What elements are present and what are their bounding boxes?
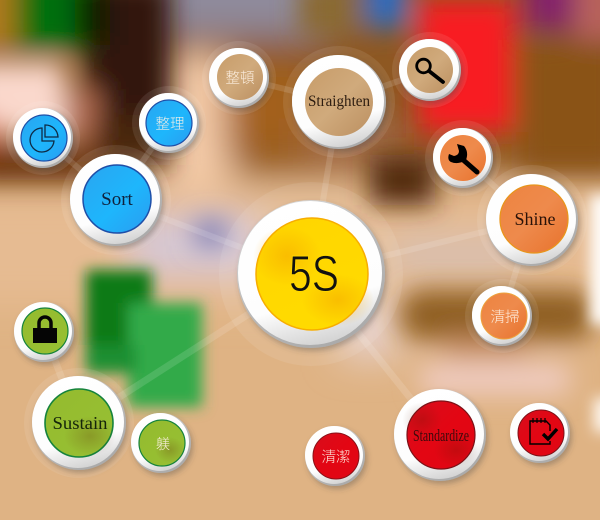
node: 清掃 [472,286,532,346]
node: 清潔 [305,426,365,486]
node: Standardize [394,389,486,481]
icon node: checklist [510,403,570,463]
node: Shine: Shine [514,209,556,229]
node: Sort [70,154,162,246]
node: 整頓: 整頓 [226,67,254,88]
icon node: wrench [433,128,493,188]
icon node: pie chart [13,108,73,168]
node: 整理 [139,93,199,153]
central node: 5S [237,200,385,348]
node: 躾 [131,413,191,473]
title: 5S: 5S [289,245,339,302]
node: 清潔: 清潔 [322,446,350,467]
node: Sustain: Sustain [52,413,108,433]
icon node: padlock [14,302,74,362]
node: Sort: Sort [101,189,134,210]
node: 清掃: 清掃 [490,306,520,327]
node: 整頓 [209,48,269,108]
node: Sustain [32,376,126,470]
connector lines [52,78,520,401]
node: Straighten [292,55,386,149]
node: Straighten: Straighten [308,93,370,110]
icon node: magnifying glass [399,39,461,101]
node: Shine [486,174,578,266]
node: 躾: 躾 [156,434,170,454]
node: Standardize: Standardize [413,426,469,445]
node: 整理: 整理 [156,113,184,134]
